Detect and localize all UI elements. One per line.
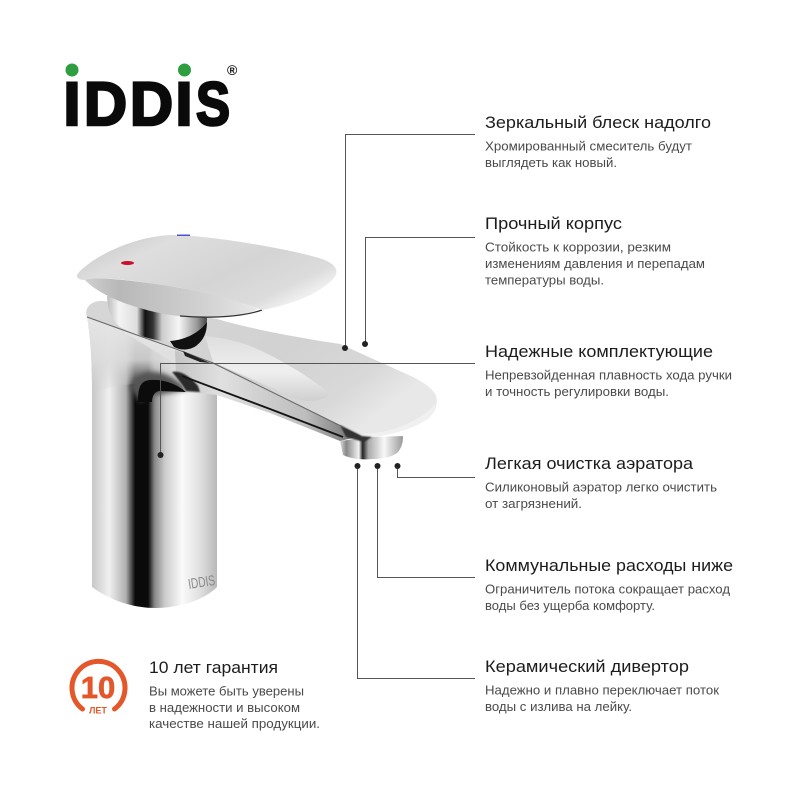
heading: Зеркальный блеск надолго: [485, 113, 711, 132]
aerator: [340, 436, 403, 459]
callout line 4: [394, 463, 475, 478]
description: [485, 368, 732, 399]
description: [485, 480, 717, 511]
callout line 6: [354, 463, 475, 678]
description: воды с излива на лейку.: [485, 699, 632, 714]
heading: Прочный корпус: [485, 214, 623, 233]
faucet body column: [87, 316, 217, 608]
red hot mark: [121, 261, 134, 265]
description: Ограничитель потока сокращает расход: [485, 582, 730, 596]
logo wordmark: [64, 70, 230, 138]
heading: Легкая очистка аэратора: [485, 454, 694, 473]
heading: 10 лет гарантия: [149, 658, 278, 677]
description: качестве нашей продукции.: [149, 716, 320, 731]
spout underside black line: [182, 376, 343, 437]
spout tip shadow: [340, 425, 372, 442]
text block: ceramic diverter: [485, 657, 719, 714]
spout rim highlight: [87, 317, 345, 428]
badge arc: [72, 661, 125, 709]
logo: IDDIS: [64, 62, 238, 138]
description: [485, 682, 719, 714]
description: [485, 582, 730, 613]
description: температуры воды.: [485, 272, 604, 288]
description: Силиконовый аэратор легко очистить: [485, 480, 717, 494]
heading: Керамический дивертор: [485, 657, 689, 676]
text block: durable body: [485, 214, 705, 288]
spout front lip: [358, 403, 436, 438]
neck stem: [183, 351, 210, 363]
description: изменениям давления и перепадам: [485, 256, 705, 271]
badge label: ЛЕТ: [89, 706, 107, 716]
callout line 5: [374, 463, 475, 578]
registered mark: ®: [227, 62, 238, 78]
text block: lower utility costs: [485, 556, 733, 613]
spout underside: [175, 350, 361, 441]
description: выглядеть как новый.: [485, 155, 617, 170]
handle neck: [107, 296, 207, 342]
handle top: [77, 235, 336, 310]
spout top plane: [86, 301, 437, 438]
logo green dots: [66, 64, 191, 76]
description: и точность регулировки воды.: [485, 384, 669, 399]
text block: aerator cleaning: [485, 454, 717, 511]
callout line 2: [362, 238, 475, 347]
description: [485, 240, 705, 288]
badge number: 10: [81, 670, 115, 705]
description: Вы можете быть уверены: [149, 684, 304, 698]
description: от загрязнений.: [485, 496, 582, 511]
description: в надежности и высоком: [149, 700, 300, 715]
description: [149, 684, 320, 731]
heading: Надежные комплектующие: [485, 342, 713, 361]
spout scoop: [205, 336, 328, 401]
faucet illustration: [77, 234, 437, 608]
description: Хромированный смеситель будут: [485, 138, 692, 154]
neck dark crescent: [170, 322, 207, 350]
upper body fade: [87, 316, 185, 396]
logo wordmark: S: [196, 70, 230, 138]
logo wordmark: D: [130, 70, 173, 138]
swirl at spout root: [172, 372, 200, 392]
blue cold mark: [177, 234, 190, 236]
description: Надежно и плавно переключает поток: [485, 682, 719, 698]
logo wordmark: I: [64, 70, 80, 138]
description: Непревзойденная плавность хода ручки: [485, 368, 732, 382]
dark band at column top: [138, 380, 186, 402]
description: воды без ущерба комфорту.: [485, 598, 655, 613]
callout line 3: [158, 364, 475, 458]
callout line 1: [342, 134, 475, 351]
text block: mirror shine: [485, 113, 711, 170]
description: Стойкость к коррозии, резким: [485, 240, 671, 254]
logo wordmark: I: [176, 70, 192, 138]
shadow above column band: [130, 372, 188, 402]
text block: warranty: [149, 658, 320, 731]
handle lower edge: [180, 310, 262, 317]
handle lower face: [84, 278, 258, 317]
description: [485, 138, 692, 170]
text block: reliable components: [485, 342, 732, 399]
icon: 10 years badge: [72, 661, 125, 716]
logo wordmark: D: [84, 70, 127, 138]
faucet engraved logo: IDDIS: [187, 573, 216, 593]
heading: Коммунальные расходы ниже: [485, 556, 733, 575]
